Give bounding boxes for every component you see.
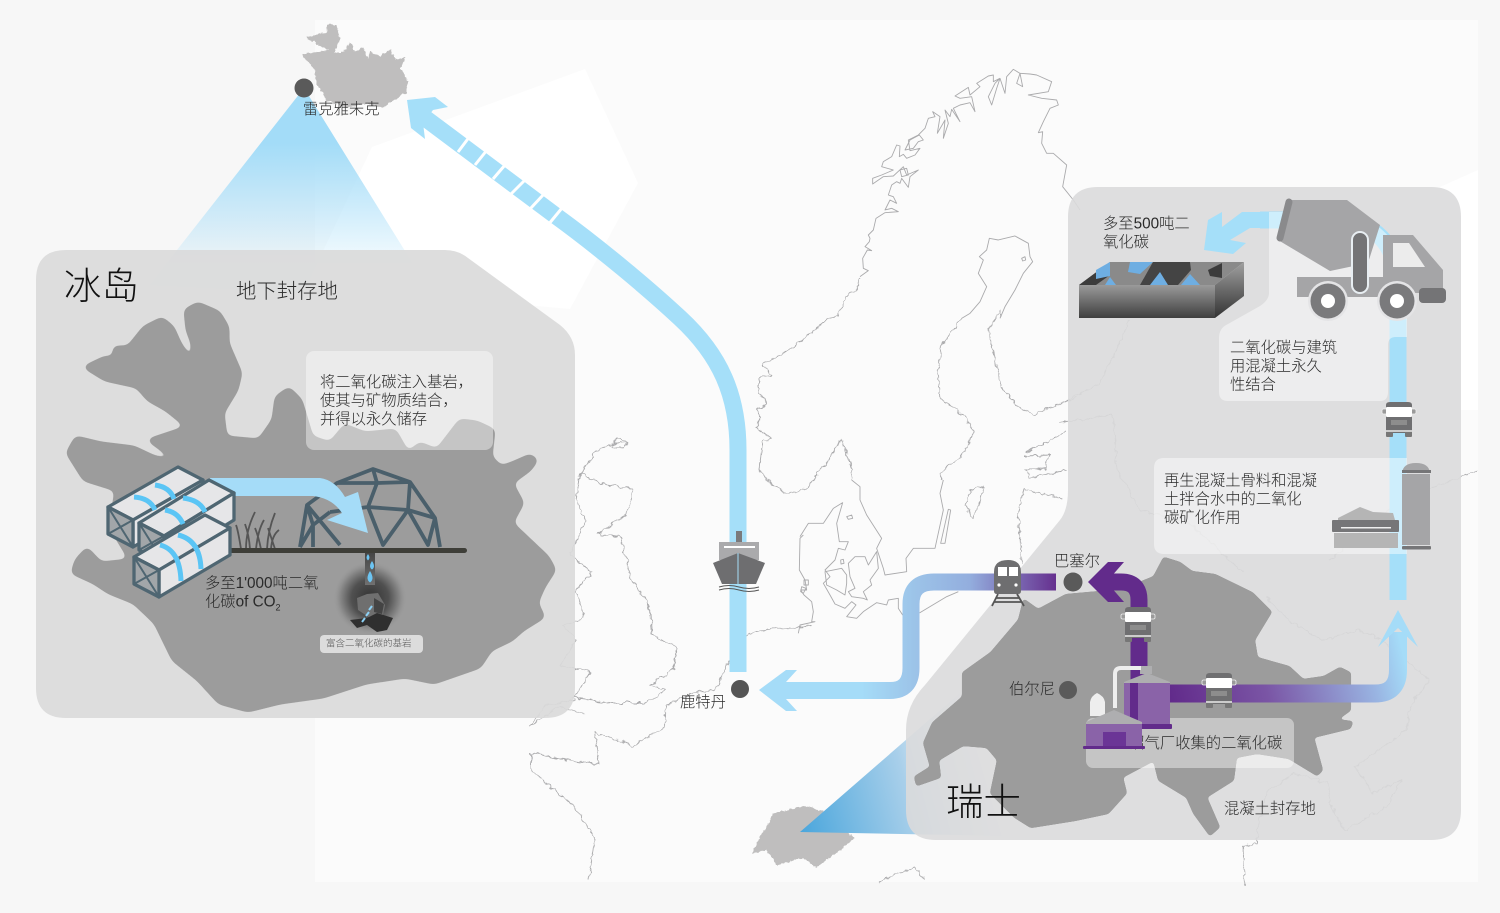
title: Switzerland: 瑞士 <box>946 781 1021 823</box>
text: concrete binding: 性结合 <box>1230 376 1276 394</box>
map: large Iceland <box>67 303 555 711</box>
arrow: CO2 into dome <box>210 478 368 533</box>
arrow: sea route to Iceland <box>407 97 738 672</box>
label: Basel: 巴塞尔 <box>1054 553 1100 570</box>
panel: injection text box <box>306 351 493 450</box>
text: biogas source: 从沼气厂收集的二氧化碳 <box>1114 735 1282 752</box>
container 1 <box>108 467 203 547</box>
text: injection description: 使其与矿物质结合， <box>320 392 458 410</box>
text: CO2 amount Iceland: 化碳of CO <box>205 594 276 610</box>
text: injection description: 将二氧化碳注入基岩， <box>320 374 473 391</box>
label: Rotterdam: 鹿特丹 <box>680 694 726 711</box>
icon: recycling plant <box>1332 463 1431 550</box>
icon: small map of Switzerland <box>752 806 854 867</box>
arrow: purple to Basel <box>1088 562 1139 690</box>
text: CO2 amount concrete: 氧化碳 <box>1103 234 1149 251</box>
panel: concrete text box <box>1219 212 1407 401</box>
arrow: purple road to blue <box>1170 610 1418 694</box>
map: large Switzerland <box>915 558 1352 835</box>
container 2 <box>139 480 234 563</box>
icon: rock <box>350 593 393 632</box>
panel: Switzerland <box>906 187 1461 840</box>
panel: Iceland <box>36 250 575 718</box>
text: CO2 amount concrete: 多至500吨二 <box>1103 216 1190 232</box>
text: injection description: 并得以永久储存 <box>320 411 427 428</box>
arrow: blue road to concrete <box>1204 212 1398 600</box>
label: Reykjavik: 雷克雅未克 <box>303 101 380 118</box>
icon: truck on road north <box>1121 607 1155 642</box>
text: mineralisation: 碳矿化作用 <box>1164 510 1240 526</box>
icon: Reykjavik dot <box>294 78 314 98</box>
title: Iceland: 冰岛 <box>64 265 139 307</box>
text: CO2 amount Iceland: 多至1'000吨二氧 <box>205 575 318 592</box>
icon: biogas plant <box>1083 666 1172 749</box>
icon: Bern dot <box>1059 681 1077 699</box>
arrow: rail and road to Rotterdam <box>759 582 1056 711</box>
label: mineralised bedrock: 富含二氧化碳的基岩 <box>326 638 412 650</box>
icon: truck to concrete plant <box>1382 402 1416 437</box>
icon: geodesic dome <box>300 469 440 547</box>
label: Bern: 伯尔尼 <box>1009 681 1055 698</box>
icon: ground line <box>226 548 467 553</box>
container 3 <box>134 515 230 597</box>
text: concrete binding: 用混凝土永久 <box>1230 358 1322 375</box>
icon: rock halo and injection shaft <box>333 553 407 635</box>
label: mineralised bedrock <box>320 635 423 653</box>
icon: cement mixer truck <box>1278 200 1446 321</box>
callout wedge: Iceland <box>150 88 440 300</box>
panel: mineralisation text box <box>1154 458 1407 554</box>
icon: Basel dot <box>1064 572 1082 592</box>
icon: concrete block <box>1079 262 1244 318</box>
icon: train <box>992 560 1024 606</box>
callout wedge: Switzerland <box>800 693 1002 836</box>
map detail: northern Norway and Bothnia <box>860 69 1080 318</box>
text: concrete binding: 二氧化碳与建筑 <box>1230 340 1337 356</box>
text: mineralisation: 土拌合水中的二氧化 <box>1164 491 1302 508</box>
icon: grass <box>236 512 279 549</box>
heading: concrete storage: 混凝土封存地 <box>1224 800 1316 818</box>
map detail: Denmark and southern Sweden <box>798 480 958 633</box>
heading: underground storage: 地下封存地 <box>236 280 338 303</box>
text: mineralisation: 再生混凝土骨料和混凝 <box>1164 472 1317 490</box>
icon: Rotterdam dot <box>731 680 749 698</box>
container stack <box>108 467 234 597</box>
icon: ship <box>713 531 765 592</box>
icon: truck on road east <box>1202 673 1236 708</box>
text: CO2 amount Iceland: 2 <box>276 602 281 612</box>
icon: small map of Iceland <box>302 25 408 107</box>
map: Europe outline <box>530 69 1478 885</box>
panel: biogas text box <box>1086 718 1294 768</box>
